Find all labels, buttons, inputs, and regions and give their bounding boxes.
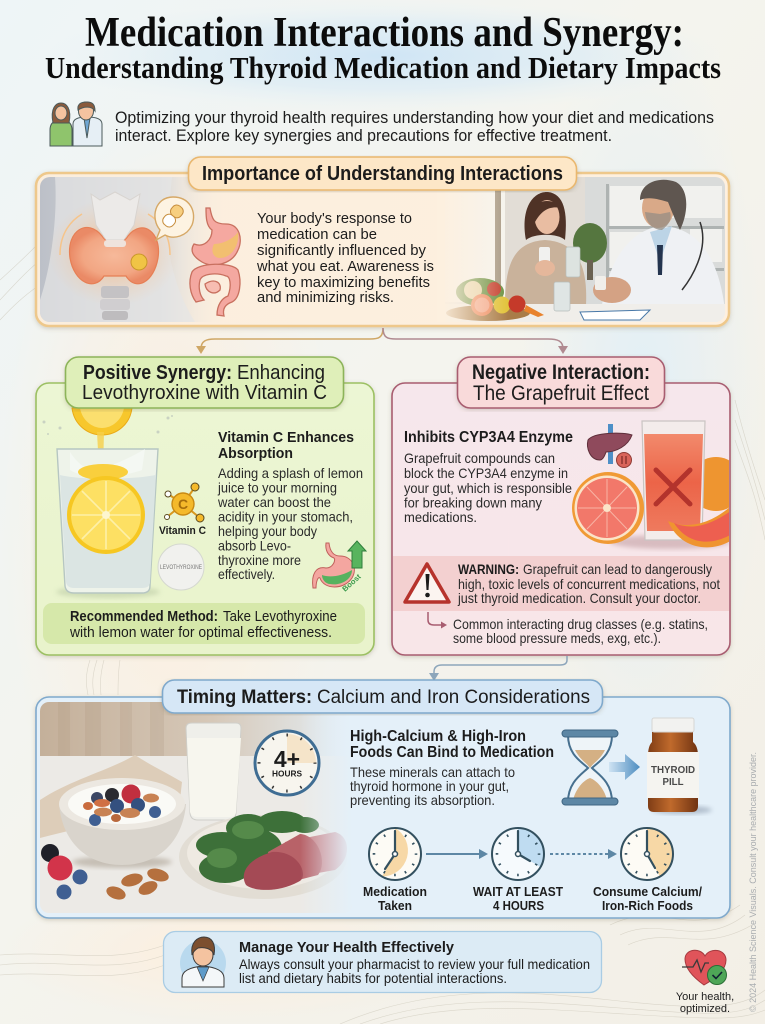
icon: 4+ hours clock xyxy=(255,731,319,795)
heading pill: importance: Importance of Understanding Interactions xyxy=(202,162,563,185)
tagline: optimized. xyxy=(680,1003,730,1015)
text: CYP3A4 enzyme: medications. xyxy=(404,510,477,525)
text: interacting drug classes xyxy=(453,617,708,646)
callout: recommended method xyxy=(43,603,365,644)
heading pill: positive synergy xyxy=(66,357,344,408)
text: interacting drug classes: Common interacting drug classes (e.g. statins, xyxy=(453,617,708,632)
icon: pharmacist xyxy=(180,937,226,987)
illustration: grapefruit and juice xyxy=(572,421,743,549)
text: vitamin c absorption: Vitamin C Enhances xyxy=(218,429,354,446)
label: wait at least 4 hours: 4 HOURS xyxy=(493,898,544,913)
title xyxy=(45,10,721,85)
icon: thyroid pill bottle xyxy=(647,718,712,814)
icon: medication speech bubble xyxy=(155,197,194,240)
text: vitamin c absorption: Adding a splash of lemon xyxy=(218,466,363,481)
callout: recommended method: Take Levothyroxine xyxy=(223,608,337,625)
text: vitamin c absorption: thyroxine more xyxy=(218,553,301,568)
intro text: interact. Explore key synergies and precautions for effective treatment. xyxy=(115,127,612,145)
warning band: high, toxic levels of concurrent medications, not xyxy=(458,577,720,592)
panel: positive synergy xyxy=(36,357,374,655)
warning band: Grapefruit can lead to dangerously xyxy=(523,562,712,577)
photo: calcium and iron rich foods xyxy=(40,702,352,913)
text: vitamin c absorption xyxy=(217,429,363,582)
text: importance body: and minimizing risks. xyxy=(257,289,394,306)
text: vitamin c absorption: effectively. xyxy=(218,567,275,582)
photo: patient and doctor consultation xyxy=(437,177,726,322)
label: medication taken: Taken xyxy=(378,898,412,913)
clock: wait at least four hours xyxy=(492,828,544,880)
timeline: medication then wait then food xyxy=(363,828,702,913)
text: manage health: Always consult your pharmacist to review your full medication xyxy=(239,957,590,972)
text: manage health: Manage Your Health Effectively xyxy=(239,939,455,956)
heading pill: negative interaction: Negative Interaction: xyxy=(472,361,650,384)
text: importance body xyxy=(256,210,434,306)
illustration: thyroid and neck xyxy=(40,177,196,322)
label: wait at least 4 hours xyxy=(473,884,563,913)
icon: levothyroxine tablet: LEVOTHYROXINE xyxy=(160,565,202,571)
icon: heart with check xyxy=(682,950,726,985)
text: CYP3A4 enzyme xyxy=(404,429,573,525)
text: manage health: list and dietary habits for potential interactions. xyxy=(239,971,507,986)
icon: happy stomach with boost arrow xyxy=(313,541,366,593)
heading pill: timing matters xyxy=(162,680,602,713)
icon: thyroid pill bottle: PILL xyxy=(662,776,684,788)
arrow: to drug classes xyxy=(428,612,447,628)
icon: liver xyxy=(588,424,632,468)
icon: vitamin c molecule: C xyxy=(178,496,188,512)
text: vitamin c absorption: absorb Levo- xyxy=(218,538,291,554)
warning band xyxy=(393,556,729,611)
icon: thyroid pill bottle: THYROID xyxy=(651,764,695,776)
text: vitamin c absorption: Absorption xyxy=(218,445,293,462)
arrow: dotted to food xyxy=(550,849,617,859)
label: consume calcium and iron foods xyxy=(593,884,702,913)
arrow: to timing section xyxy=(429,656,567,681)
warning band: WARNING: xyxy=(458,562,519,577)
table and food xyxy=(496,304,725,322)
warning band: just thyroid medication. Consult your doctor. xyxy=(457,591,701,606)
arrow: hourglass to bottle xyxy=(609,754,640,780)
heading pill: positive synergy: Enhancing xyxy=(237,361,325,384)
text: minerals bind to medication: These minerals can attach to xyxy=(350,765,515,780)
arrows: branching to two panels xyxy=(196,328,568,354)
icon: levothyroxine tablet xyxy=(158,544,204,590)
text: importance body: what you eat. Awareness is xyxy=(256,258,434,275)
text: interacting drug classes: some blood pressure meds, exg, etc.). xyxy=(453,631,661,646)
text: vitamin c absorption: helping your body xyxy=(218,524,317,539)
intro text: Optimizing your thyroid health requires understanding how your diet and medications xyxy=(115,109,714,127)
heading pill: timing matters: Calcium and Iron Considerations xyxy=(317,687,590,708)
intro text xyxy=(115,109,714,145)
tagline: Your health, xyxy=(676,991,734,1003)
text: vitamin c absorption: water can boost the xyxy=(217,495,331,510)
heading pill: importance xyxy=(188,157,576,190)
text: minerals bind to medication: preventing its absorption. xyxy=(350,793,495,808)
text: CYP3A4 enzyme: Inhibits CYP3A4 Enzyme xyxy=(404,429,573,446)
text: importance body: Your body's response to xyxy=(257,210,412,227)
icon: warning triangle xyxy=(405,564,449,602)
icon: 4+ hours clock: HOURS xyxy=(272,768,302,778)
label: wait at least 4 hours: WAIT AT LEAST xyxy=(473,884,563,899)
heading pill: negative interaction xyxy=(458,357,664,408)
illustration: glass of lemon water xyxy=(42,408,173,598)
text: vitamin c absorption: juice to your morning xyxy=(217,480,337,496)
panel: manage your health xyxy=(164,932,602,992)
doctor xyxy=(602,226,724,304)
woman xyxy=(505,240,586,305)
clock: consume foods xyxy=(621,828,673,880)
icon: stomach and intestines xyxy=(190,208,240,316)
panel: timing matters xyxy=(36,680,730,918)
text: minerals bind to medication: High-Calcium & High-Iron xyxy=(350,728,526,745)
title: Medication Interactions and Synergy: xyxy=(85,10,684,56)
text: minerals bind to medication: thyroid hormone in your gut, xyxy=(350,779,509,794)
tagline xyxy=(676,991,734,1015)
text: importance body: significantly influenced by xyxy=(257,242,426,259)
icon: 4+ hours clock: 4+ xyxy=(274,746,300,772)
label: medication taken xyxy=(363,884,427,913)
clock: medication taken xyxy=(369,828,421,880)
copyright: © 2024 Health Science Visuals. Consult your healthcare provider. xyxy=(748,752,759,1012)
label: medication taken: Medication xyxy=(363,884,427,899)
text: importance body: key to maximizing benefits xyxy=(257,274,430,291)
panel: importance of understanding interactions xyxy=(36,157,729,326)
icon: hourglass xyxy=(562,730,618,805)
panel: negative interaction xyxy=(392,357,743,655)
text: CYP3A4 enzyme: for breaking down many xyxy=(404,496,542,510)
heading pill: negative interaction: The Grapefruit Effect xyxy=(473,382,649,405)
label: consume calcium and iron foods: Consume Calcium/ xyxy=(593,884,702,899)
text: minerals bind to medication xyxy=(350,728,554,808)
heading pill: timing matters: Timing Matters: xyxy=(177,687,312,708)
text: CYP3A4 enzyme: your gut, which is responsible xyxy=(404,481,572,496)
text: CYP3A4 enzyme: Grapefruit compounds can xyxy=(404,451,555,466)
icon: vitamin c molecule xyxy=(159,483,206,537)
callout: recommended method: with lemon water for optimal effectiveness. xyxy=(69,624,332,641)
icon: happy stomach with boost arrow: Boost xyxy=(340,572,363,593)
arrow: solid to wait xyxy=(426,849,488,859)
text: vitamin c absorption: acidity in your stomach, xyxy=(218,510,353,524)
icon: vitamin c molecule: Vitamin C xyxy=(159,525,206,537)
label: consume calcium and iron foods: Iron-Rich Foods xyxy=(602,898,693,913)
heading pill: positive synergy: Levothyroxine with Vitamin C xyxy=(82,381,327,404)
callout: recommended method: Recommended Method: xyxy=(70,608,218,625)
text: minerals bind to medication: Foods Can Bind to Medication xyxy=(350,744,554,761)
text: manage health xyxy=(239,939,590,986)
text: CYP3A4 enzyme: block the CYP3A4 enzyme in xyxy=(404,466,568,481)
heading pill: positive synergy: Positive Synergy: xyxy=(83,361,232,384)
text: importance body: medication can be xyxy=(257,226,377,243)
icon: patient and doctor xyxy=(50,102,102,146)
